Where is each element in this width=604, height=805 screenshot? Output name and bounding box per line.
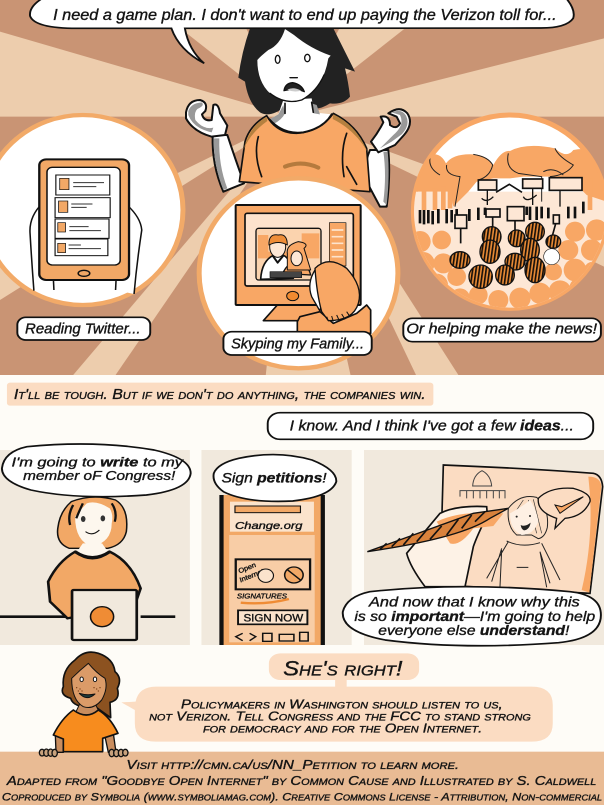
- speech bubble: member oF Congress!: [23, 469, 175, 484]
- neck shading: [269, 103, 320, 124]
- nose: [289, 77, 298, 78]
- panel: help everyone understand: [364, 450, 604, 645]
- caption: Skyping my family: Skyping my Family...: [231, 336, 364, 352]
- right hand: [371, 109, 410, 152]
- Skyping scene: [236, 205, 371, 333]
- tree outlines: [430, 148, 573, 207]
- phone page: [229, 535, 315, 642]
- neck: [77, 543, 108, 557]
- sunburst background: [0, 0, 604, 375]
- left arm: [213, 135, 244, 192]
- tablet screen: [47, 167, 120, 265]
- hair strands: [69, 503, 116, 525]
- raised placards: [455, 207, 559, 228]
- white haired protester: [544, 249, 560, 265]
- petition card: [236, 559, 310, 589]
- callout bubble: policymakers: for democracy and for the Open Internet.: [203, 721, 482, 735]
- mouth: [284, 83, 304, 92]
- face: [75, 502, 112, 547]
- right fingers: [109, 749, 128, 757]
- phone sides: [221, 495, 323, 645]
- capitol sketch: [460, 471, 505, 498]
- footer band: [0, 752, 604, 805]
- table: [0, 613, 175, 621]
- heading bubble: she's right: She's right!: [283, 656, 403, 680]
- phone body: [221, 495, 324, 645]
- speech bubble: I know: [268, 413, 593, 439]
- right arm: [366, 150, 389, 207]
- speech bubble: I know: I know. And I think I've got a few ideas...: [290, 419, 574, 434]
- narration: it'll be tough: It'll be tough. But if we don't do anything, the companies win.: [14, 387, 426, 403]
- character: narrator girl: [39, 652, 128, 757]
- smile: [86, 530, 99, 534]
- middle section: [0, 383, 604, 645]
- drawing on paper: [367, 465, 603, 593]
- drawn woman body: [487, 541, 560, 587]
- face: [72, 663, 106, 707]
- caption: Skyping my family: [223, 332, 372, 355]
- narration: it'll be tough: [7, 383, 433, 406]
- tongue: [287, 88, 301, 91]
- monitor screen: [245, 213, 353, 286]
- speech bubble: [214, 455, 336, 501]
- viewer shirt: [297, 305, 371, 333]
- drawn woman mouth: [521, 523, 531, 530]
- man collar: [273, 256, 283, 263]
- caption group: [17, 0, 601, 355]
- crowd dot ground: [409, 219, 604, 312]
- circle group: left and center: [0, 115, 398, 368]
- pen: [367, 508, 508, 552]
- hair strands: [517, 499, 542, 533]
- top speech bubble: I need a game plan. I don't want to end up paying the Verizon toll for...: [53, 6, 557, 24]
- bubble: now that I know: And now that I know why this: [368, 595, 580, 610]
- circle: Skyping family: [199, 178, 398, 368]
- left hand: [186, 100, 227, 137]
- monitor logo: [287, 291, 299, 301]
- eyes: [80, 677, 97, 682]
- circle: helping make the news: [409, 115, 604, 312]
- shirt: [53, 710, 118, 752]
- orange fence posts: [424, 178, 590, 210]
- caption: Reading Twitter: Reading Twitter...: [25, 321, 141, 337]
- fence: [420, 202, 583, 224]
- right fingers shading: [380, 111, 408, 148]
- shirt: [48, 552, 141, 618]
- viewer hair: [315, 262, 359, 321]
- callout bubble: policymakers: not Verizon. Tell Congress and the FCC to stand strong: [149, 710, 531, 723]
- panel: sign petitions: [201, 450, 352, 645]
- no-toll sign: [285, 567, 303, 583]
- viewer face: [310, 270, 324, 310]
- eyes: [275, 54, 310, 63]
- panel: top scene: [0, 0, 604, 375]
- neck: [269, 98, 332, 133]
- petition label: Internet: [238, 567, 266, 584]
- site name: Change.org: [235, 521, 302, 532]
- hair back: [58, 497, 127, 548]
- caption: helping make the news: Or helping make the news!: [406, 321, 598, 337]
- protest signs: [478, 178, 582, 192]
- drawn woman hair: [508, 496, 548, 539]
- freckles: [77, 688, 100, 691]
- right arm shading: [383, 152, 389, 205]
- drawing hand: [407, 506, 487, 587]
- panel: middle section background: [0, 375, 604, 805]
- shirt seams: [256, 133, 357, 184]
- viewer hair strands: [327, 312, 350, 322]
- laptop logo: [91, 607, 114, 627]
- caption: Reading Twitter: [17, 317, 150, 340]
- footer line: adapted from: Adapted from "Goodbye Open Internet" by Common Cause and Illustrated by S. Caldwell: [6, 774, 596, 788]
- speech bubble: Sign petitions!: [221, 471, 327, 486]
- collar: [269, 114, 332, 133]
- left fingers: [39, 749, 57, 757]
- video window: [256, 228, 321, 280]
- sidebar rows: [332, 230, 343, 257]
- footer line: visit: Visit http://cmn.ca/us/NN_Petition to learn more.: [126, 758, 459, 772]
- ground: [410, 192, 604, 312]
- bubble: now that I know: everyone else understand!: [378, 623, 570, 639]
- man on video: [261, 255, 293, 279]
- shirt: [239, 113, 370, 192]
- bottom section: [0, 653, 604, 805]
- left arm shading: [214, 138, 227, 190]
- signatures label: SIGNATURES: [237, 592, 288, 600]
- collar: [75, 552, 110, 557]
- bubble: now that I know: is so important—I'm going to help: [354, 609, 595, 625]
- sign now button: [238, 610, 307, 624]
- sign poles and protesters: [482, 188, 560, 207]
- callout bubble: policymakers: Policymakers in Washington should listen to us,: [181, 697, 503, 711]
- video caption bar: [270, 272, 302, 278]
- video backdrop: [258, 233, 319, 258]
- left fingers shading: [188, 102, 213, 132]
- contact sidebar: [329, 223, 346, 266]
- tablet home button: [78, 270, 90, 276]
- bubble: now that I know: [343, 587, 601, 646]
- crowd heads: [450, 222, 561, 288]
- face: [257, 29, 331, 101]
- tablet: [39, 159, 129, 280]
- eyes: [81, 516, 86, 522]
- petition label: [236, 561, 266, 584]
- petition face: [258, 569, 273, 582]
- signature scribble: [241, 599, 289, 603]
- tree canopy: [417, 146, 604, 207]
- shirt shading: [243, 114, 367, 152]
- smile: [79, 693, 95, 698]
- neck lines: [285, 102, 313, 113]
- speech bubble: [2, 444, 191, 497]
- monitor stand: [263, 305, 322, 321]
- hair: [62, 652, 120, 718]
- monitor: [236, 205, 361, 305]
- heading bubble: she's right: [269, 653, 419, 688]
- drawn woman face: [510, 500, 538, 535]
- caption: helping make the news: [403, 318, 601, 342]
- panel: write to Congress: [0, 444, 191, 645]
- laptop: [72, 590, 137, 640]
- character: worried woman: [186, 28, 410, 207]
- hair: [238, 28, 355, 114]
- hand shading: [437, 513, 503, 544]
- tweet cards: [55, 175, 110, 256]
- petition label: Open: [236, 561, 258, 575]
- neck: [76, 703, 99, 715]
- woman on video: [283, 262, 311, 275]
- drawn woman eyes: [516, 516, 518, 518]
- tablet hands: [30, 203, 142, 294]
- url bar: [235, 506, 300, 513]
- tweet avatars: [58, 178, 69, 253]
- tweet text lines: [69, 183, 104, 249]
- top speech bubble: [30, 0, 574, 63]
- sheet edge shading: [582, 477, 601, 593]
- circle: reading Twitter: [0, 115, 183, 305]
- jaw line: [270, 75, 324, 101]
- callout bubble: policymakers: [121, 687, 553, 742]
- panel: sign petitions: SIGN NOW: [243, 613, 303, 624]
- speech bubble: I'm going to write to my: [12, 456, 184, 470]
- drawing sheet: [440, 465, 603, 593]
- shirt fold marks: [285, 164, 318, 168]
- check mark thought bubble: [538, 488, 590, 528]
- placard poles: [461, 217, 556, 243]
- phone header: [230, 502, 314, 532]
- arms: [55, 733, 116, 752]
- phone toolbar icons: [236, 632, 308, 641]
